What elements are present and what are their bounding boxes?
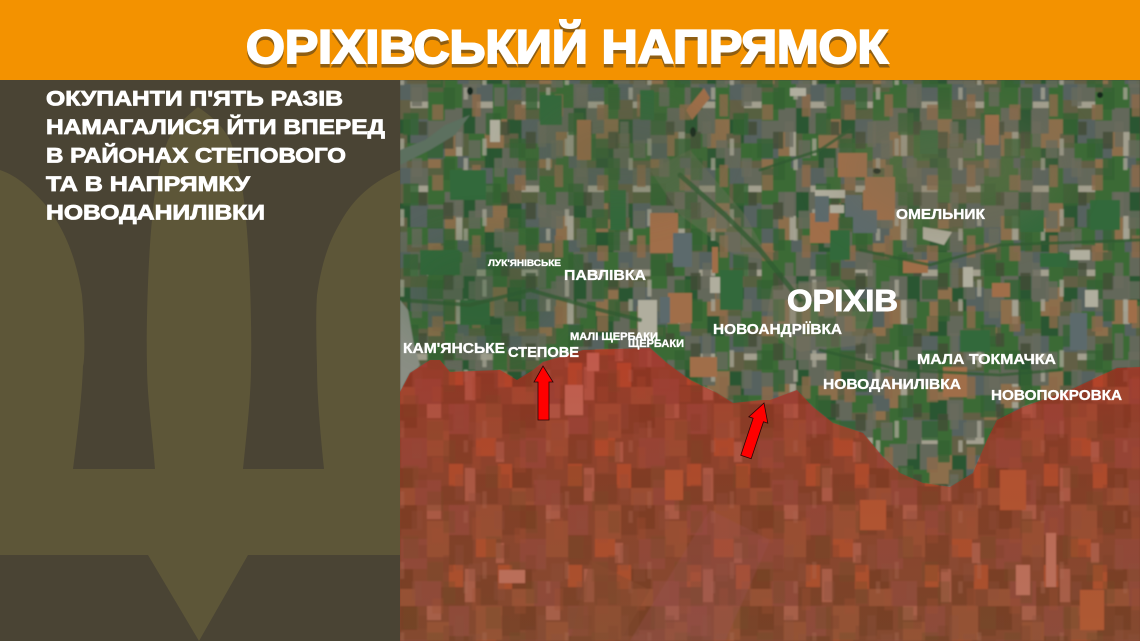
map: tonal washes xyxy=(400,100,1060,340)
map: landmark fields north xyxy=(420,88,1137,397)
arrow: Stepove attack xyxy=(534,366,553,420)
title: ОРІХІВСЬКИЙ НАПРЯМОК xyxy=(246,24,888,76)
occupied territory overlay xyxy=(400,348,1140,641)
label: Kamianske: КАМ'ЯНСЬКЕ xyxy=(403,340,505,357)
satellite map xyxy=(400,80,1140,641)
map: occupied fields underlay xyxy=(400,340,1140,641)
label: Orikhiv: ОРІХІВ xyxy=(787,283,898,318)
label: Shcherbaky: ЩЕРБАКИ xyxy=(628,338,684,350)
summary text block xyxy=(46,88,385,224)
trident emblem xyxy=(0,107,400,641)
label: Pavlivka: ПАВЛІВКА xyxy=(564,267,646,284)
arrow: Novodanylivka attack xyxy=(741,403,768,459)
title: ОРІХІВСЬКИЙ НАПРЯМОК xyxy=(246,20,888,73)
header bar xyxy=(0,0,1140,80)
label: Mala Tokmachka: МАЛА ТОКМАЧКА xyxy=(917,351,1056,368)
label: Novodanylivka: НОВОДАНИЛІВКА xyxy=(823,376,961,393)
summary text block: ОКУПАНТИ П'ЯТЬ РАЗІВ xyxy=(46,88,343,110)
map: reservoir and ponds xyxy=(400,87,1103,392)
label: Novopokrovka: НОВОПОКРОВКА xyxy=(991,387,1122,404)
left panel with trident emblem xyxy=(0,80,400,641)
label: Omelnyk: ОМЕЛЬНИК xyxy=(896,206,986,223)
label: Lukianivske: ЛУК'ЯНІВСЬКЕ xyxy=(488,258,561,269)
map: town north xyxy=(655,150,761,257)
label: Stepove: СТЕПОВЕ xyxy=(508,344,579,361)
summary text block: НАМАГАЛИСЯ ЙТИ ВПЕРЕД xyxy=(46,115,385,139)
summary text block: В РАЙОНАХ СТЕПОВОГО xyxy=(46,144,346,168)
map: tree belts xyxy=(400,130,1140,375)
summary text block: НОВОДАНИЛІВКИ xyxy=(46,202,265,224)
summary text block: ТА В НАПРЯМКУ xyxy=(46,173,251,196)
label: Novoandriivka: НОВОАНДРІЇВКА xyxy=(713,321,842,338)
label: Mali Shcherbaky: МАЛІ ЩЕРБАКИ xyxy=(570,331,658,343)
map: town of Orikhiv xyxy=(765,280,872,352)
settlement labels xyxy=(403,206,1122,404)
